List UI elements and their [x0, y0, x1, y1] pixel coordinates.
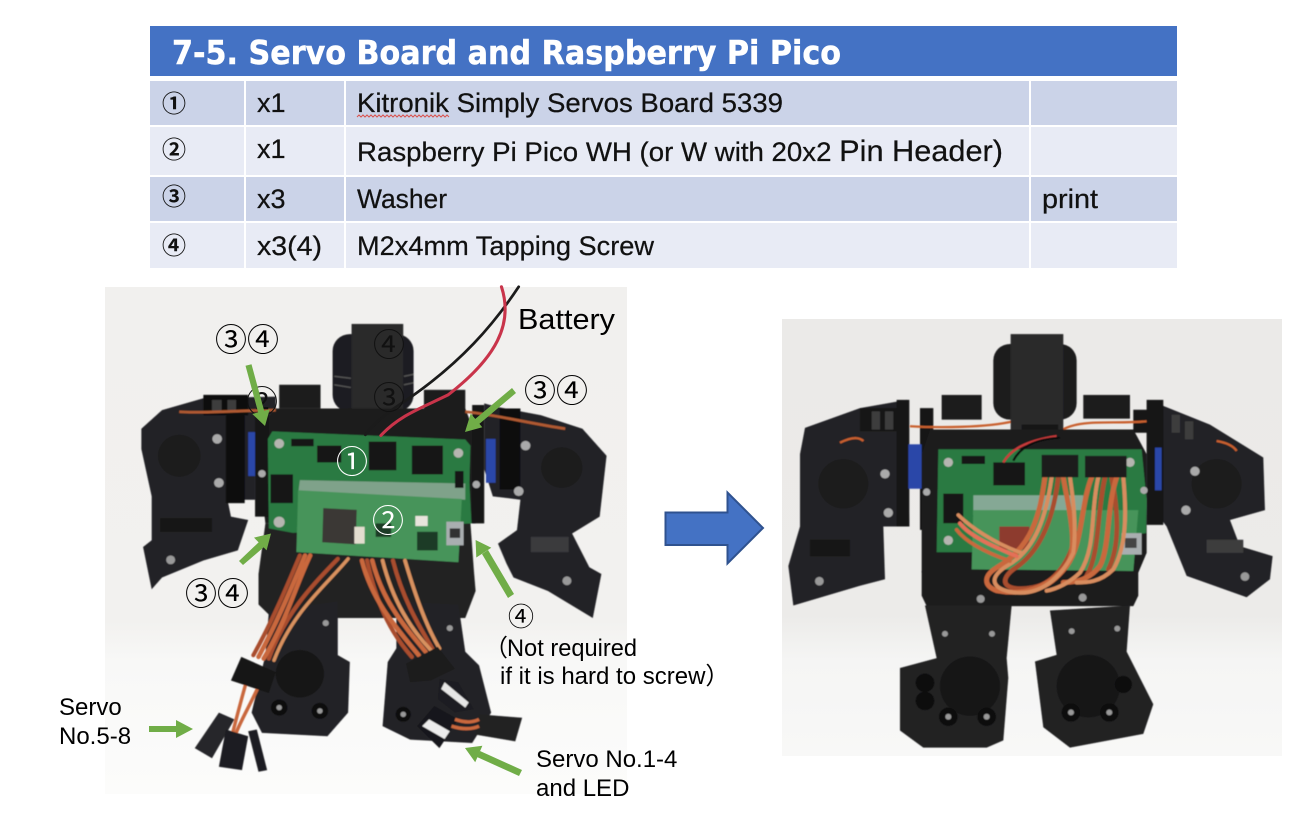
arms: [141, 397, 276, 589]
connectors: [1042, 455, 1127, 478]
straps and connectors: [231, 657, 276, 693]
arrow: top left screw: [246, 364, 270, 426]
torso: [942, 395, 982, 420]
torso: [279, 385, 321, 408]
table row 3: x3: [257, 184, 286, 214]
panel: robot photo before wiring: [59, 287, 729, 802]
legs: [252, 601, 350, 736]
head: [333, 334, 414, 412]
table row 4: [150, 223, 1177, 268]
table row 4: ④: [162, 226, 186, 261]
label: Battery: Battery: [518, 304, 616, 336]
faint markers behind robot: ④: [373, 320, 405, 366]
arrow: process direction: [666, 492, 763, 564]
panel: parts table: [150, 26, 1177, 268]
table row 3: [150, 177, 1177, 221]
table row 2: ②: [162, 130, 186, 165]
label: servo 5-8: Servo: [59, 694, 122, 721]
arrow: servo 1-4 connectors: [465, 746, 522, 776]
arrow: bottom right screw: [476, 540, 514, 598]
table row 1: ①: [162, 84, 186, 119]
table title bar: [150, 26, 1177, 76]
table row 2: x1: [257, 134, 286, 164]
legs: [900, 606, 1012, 748]
main board: [268, 431, 471, 533]
arms: [788, 400, 909, 606]
label: servo 5-8: [59, 694, 131, 750]
lower body: [922, 571, 1138, 606]
faint markers behind robot: ③: [373, 373, 405, 419]
pico board: [296, 490, 462, 562]
label: screw optional note: Not required: [507, 635, 637, 662]
table row 2: Raspberry Pi Pico WH (or W with 20x2 Pin Header): [357, 135, 1003, 168]
label: servo 1-4 and LED: Servo No.1-4: [536, 746, 677, 773]
arrow: top right screw: [465, 388, 516, 432]
wire bundles: [957, 477, 1125, 593]
label: servo 5-8: No.5-8: [59, 723, 131, 750]
arrow: bottom left screw: [239, 534, 271, 565]
label: washer and screw bottom left: ③④: [185, 569, 249, 615]
label: washer and screw top right: ③④: [524, 366, 588, 412]
table row 2: [150, 127, 1177, 175]
arrow: servo 5-8 connectors: [149, 720, 193, 738]
faint markers behind robot: [246, 320, 405, 423]
table title bar: 7-5. Servo Board and Raspberry Pi Pico: [172, 33, 841, 72]
main board: [937, 449, 1147, 552]
table row 1: Kitronik Simply Servos Board 5339: [357, 88, 783, 118]
label: screw optional note: ④: [508, 597, 534, 634]
panel: robot photo after wiring: [782, 319, 1282, 756]
table row 3: print: [1042, 184, 1099, 214]
table row 4: M2x4mm Tapping Screw: [357, 231, 654, 261]
wire bundles: [233, 555, 439, 733]
label: screw optional note: [484, 597, 729, 690]
label: screw optional note: （: [484, 635, 508, 662]
table row 1: x1: [257, 88, 286, 118]
label: part 2 on pico: ②: [372, 496, 404, 542]
pico board: [972, 510, 1138, 571]
label: servo 1-4 and LED: [536, 746, 677, 802]
table row 3: ③: [162, 177, 186, 212]
label: screw optional note: if it is hard to screw）: [500, 663, 729, 690]
table row 4: x3(4): [257, 231, 322, 261]
label: part 1 on servo board: ①: [336, 437, 368, 483]
faint markers behind robot: ②: [246, 377, 278, 423]
head: [993, 344, 1077, 420]
battery wires: [365, 287, 519, 435]
table row 1: [150, 81, 1177, 125]
label: washer and screw top left: ③④: [215, 315, 279, 361]
label: servo 1-4 and LED: and LED: [536, 775, 629, 802]
table row 3: Washer: [357, 184, 447, 214]
